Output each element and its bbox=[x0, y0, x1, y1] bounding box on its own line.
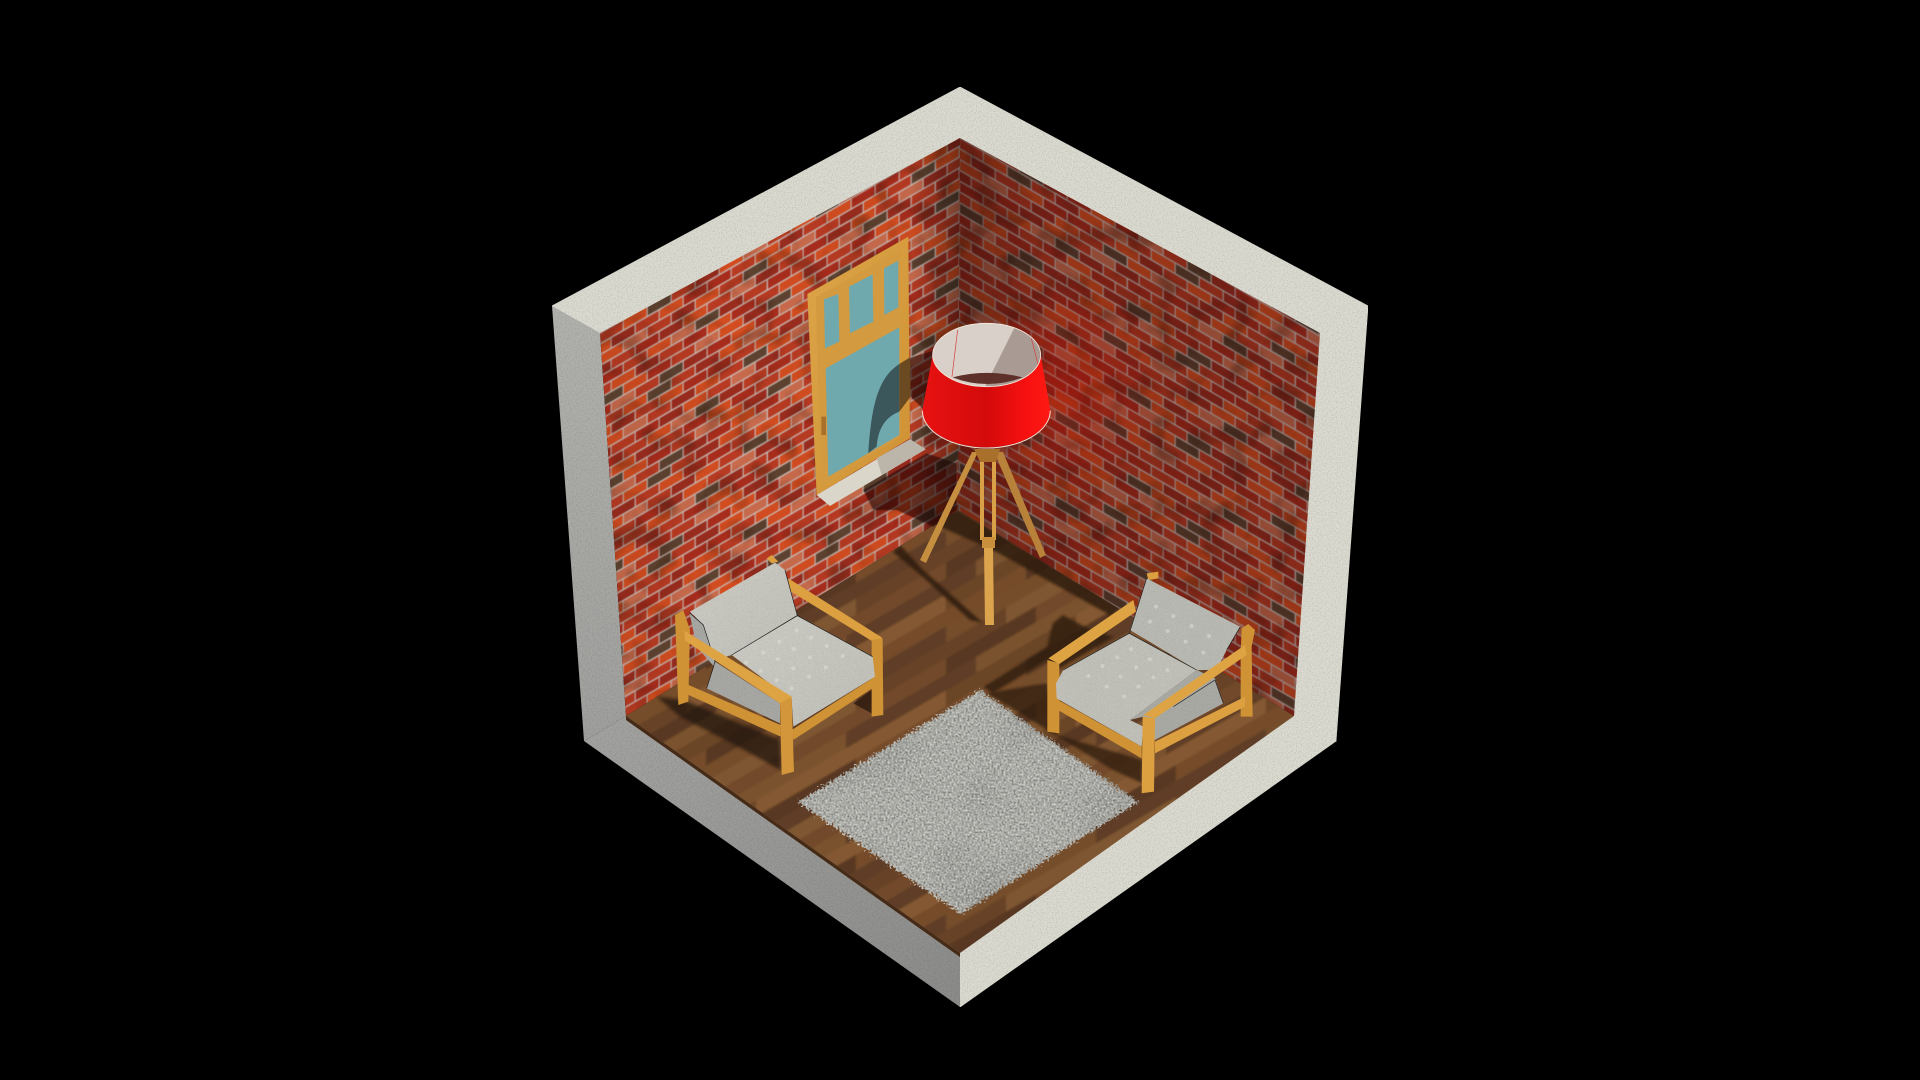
far rail and leg bbox=[1047, 572, 1255, 753]
shade outer bbox=[922, 355, 1050, 447]
window frame bbox=[807, 237, 910, 495]
tripod thin shadow bbox=[893, 545, 983, 623]
armchair left bbox=[657, 555, 883, 775]
left brick wall bbox=[596, 134, 966, 720]
window sill bbox=[817, 439, 926, 506]
cushion outlines bbox=[689, 570, 873, 688]
tripod bbox=[920, 449, 1046, 625]
seat tufts bbox=[746, 631, 843, 688]
interior hole bbox=[953, 373, 1023, 384]
under right chair shadow bbox=[987, 683, 1142, 783]
shadow along right wall bbox=[930, 510, 1120, 615]
room shell bbox=[552, 87, 1368, 1007]
front frame bbox=[1048, 600, 1247, 793]
lamp shadow on left wall bbox=[863, 351, 957, 527]
floor lamp bbox=[920, 323, 1050, 625]
left outer band bbox=[552, 306, 626, 741]
front frame bbox=[675, 555, 794, 775]
glass panes bbox=[824, 261, 899, 477]
wall cut top faces bbox=[552, 87, 1368, 333]
cushions bbox=[1056, 578, 1240, 747]
isometric room illustration bbox=[552, 87, 1368, 1007]
cushion outlines bbox=[1063, 578, 1240, 707]
shadow on glass and frame bbox=[868, 364, 899, 453]
window handle bbox=[821, 417, 826, 435]
right brick wall bbox=[954, 134, 1324, 720]
right base face bbox=[960, 716, 1336, 1007]
armchair right bbox=[1047, 572, 1255, 793]
shade interior bbox=[933, 323, 1041, 387]
chair floor shadow bbox=[657, 697, 781, 770]
wood floor bbox=[620, 505, 1300, 957]
floor left edge bbox=[626, 716, 960, 957]
arm shadow of right chair bbox=[983, 615, 1113, 693]
cushion tufts bbox=[1088, 607, 1209, 697]
window bbox=[807, 237, 926, 506]
shag rug bbox=[798, 690, 1138, 914]
lampshade bbox=[922, 323, 1050, 448]
interior wires bbox=[952, 330, 1039, 377]
far legs and arm bbox=[788, 578, 883, 740]
rims bbox=[933, 323, 1041, 387]
right outer band bbox=[1294, 306, 1368, 741]
cushions bbox=[689, 563, 875, 727]
left base face bbox=[584, 716, 960, 1007]
